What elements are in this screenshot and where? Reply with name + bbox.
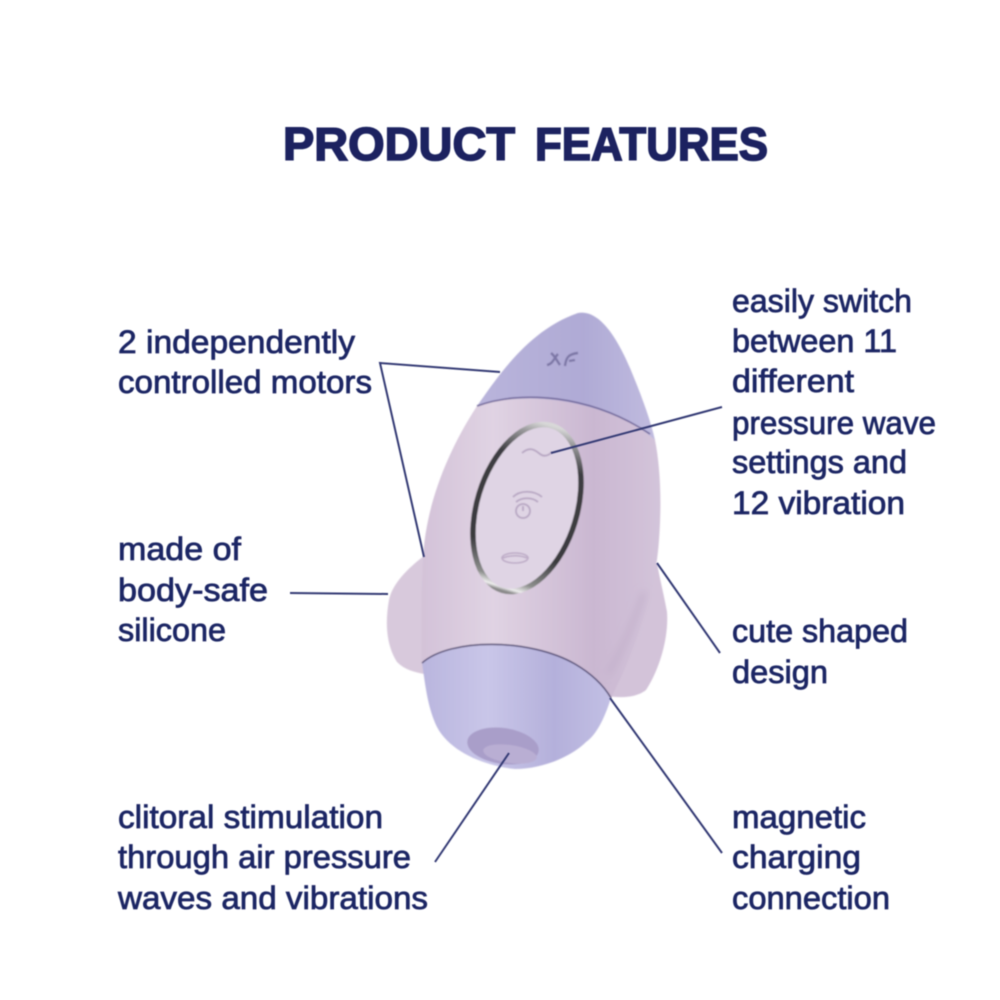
text: stimulation <box>117 799 428 916</box>
text: pressure settings: pressure wave <box>732 405 936 441</box>
title <box>283 118 768 170</box>
text: motors: 2 independently <box>118 324 355 360</box>
top cap <box>477 313 655 440</box>
callout lines <box>290 363 722 862</box>
text: shape: design <box>732 654 828 690</box>
line: stimulation <box>435 753 509 862</box>
line: magnetic <box>610 698 722 853</box>
nozzle opening <box>465 723 541 769</box>
text: pressure settings: settings and <box>732 444 907 480</box>
product illustration: rocket-shaped device <box>387 313 667 769</box>
line: shape <box>657 563 720 653</box>
line: silicone <box>290 593 388 594</box>
text: magnetic: connection <box>732 880 890 916</box>
text: magnetic <box>732 799 890 916</box>
text: motors: controlled motors <box>118 364 372 400</box>
title: FEATURES <box>535 118 768 170</box>
right fin crease <box>608 592 644 674</box>
text: silicone: made of <box>118 531 241 567</box>
text: pressure settings: easily switch <box>732 283 912 319</box>
text: magnetic: magnetic <box>732 799 866 835</box>
text: pressure settings <box>732 283 936 521</box>
icon: lips button <box>502 553 528 563</box>
right fin <box>600 563 667 697</box>
text: shape: cute shaped <box>732 613 908 649</box>
text: silicone: body-safe <box>118 572 268 608</box>
icon: wave button <box>522 449 552 456</box>
text: stimulation: through air pressure <box>118 839 411 875</box>
text: silicone: silicone <box>118 612 226 648</box>
body <box>421 392 660 698</box>
icon: logo <box>547 353 578 366</box>
icon: power button <box>513 492 542 518</box>
text: shape <box>732 613 908 690</box>
text: pressure settings: 12 vibration <box>732 485 905 521</box>
left fin <box>387 556 424 674</box>
text: pressure settings: different <box>732 363 854 399</box>
line: pressure settings <box>551 407 722 453</box>
text: motors <box>118 324 372 400</box>
nozzle <box>422 644 611 769</box>
title: PRODUCT <box>283 118 515 170</box>
text: magnetic: charging <box>732 839 861 875</box>
text: stimulation: waves and vibrations <box>117 880 428 916</box>
text: stimulation: clitoral stimulation <box>118 799 383 835</box>
text: pressure settings: between 11 <box>732 323 897 359</box>
text: silicone <box>118 531 268 648</box>
line: motors <box>380 363 500 557</box>
control panel ring <box>454 411 600 605</box>
